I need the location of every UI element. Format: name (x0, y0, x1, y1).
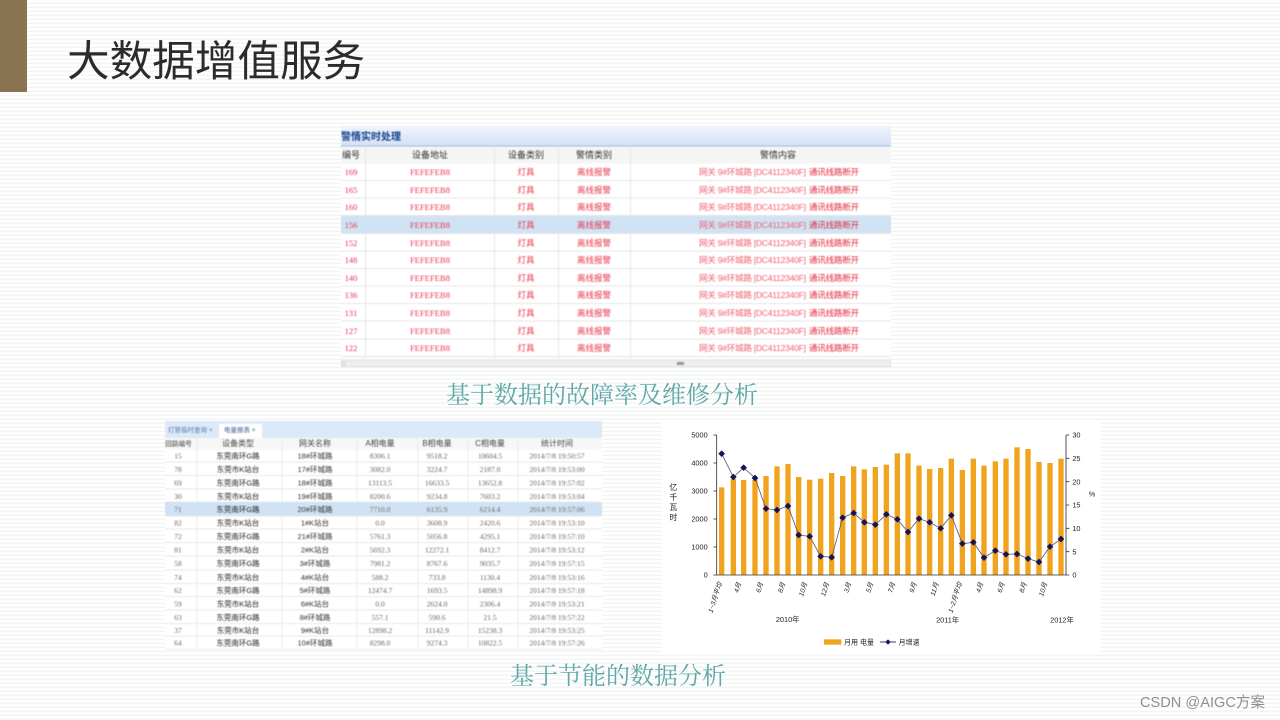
table rows: 72 (174, 532, 182, 541)
x axis month labels: 6月 (754, 581, 765, 594)
table rows: 17#环城路 (297, 464, 333, 474)
table title bar: 警情实时处理 (341, 130, 401, 143)
table rows: 离线报警 (577, 185, 611, 195)
caption: fault analysis: 基于数据的故障率及维修分析 (446, 383, 758, 409)
table rows: 东莞南环G路 (216, 558, 260, 568)
table rows: 网关 9#环城路 [DC4112340F] (699, 255, 806, 265)
table rows: 12474.7 (368, 586, 392, 595)
right axis labels: 10 (1072, 524, 1080, 533)
left axis labels: 1000 (691, 543, 708, 552)
right axis labels: 30 (1072, 431, 1080, 440)
table rows: 离线报警 (577, 255, 611, 265)
table rows: 网关 9#环城路 [DC4112340F] (699, 167, 806, 177)
table rows: 通讯线路断开 (809, 326, 859, 336)
x axis month labels (707, 580, 1049, 614)
table rows: FEFEFEB8 (410, 273, 450, 283)
table header row: 编号 (342, 149, 360, 160)
table rows: FEFEFEB8 (410, 202, 450, 212)
table rows: 4295.1 (480, 532, 501, 541)
table rows: 165 (345, 185, 357, 195)
table rows: 东莞市K站台 (217, 464, 259, 474)
right axis labels: 25 (1072, 454, 1080, 463)
table rows: 140 (345, 273, 357, 283)
table rows: FEFEFEB8 (410, 185, 450, 195)
x axis month labels: 4月 (974, 581, 985, 594)
table rows: 64 (174, 638, 182, 648)
table header: C相电量 (475, 438, 505, 448)
table rows: 136 (345, 290, 357, 300)
x axis month labels: 11月 (929, 581, 941, 597)
table rows (174, 450, 585, 648)
table rows: 8412.7 (480, 546, 501, 554)
table rows: 2420.6 (480, 518, 501, 528)
table rows: 灯具 (517, 290, 535, 300)
table rows: 13113.5 (368, 478, 392, 488)
table rows: 69 (174, 478, 182, 488)
x axis month labels: 6月 (996, 581, 1007, 594)
table rows (345, 167, 859, 353)
table rows: 东莞南环G路 (216, 638, 260, 648)
table rows: 3224.7 (427, 465, 448, 474)
table header: 网关名称 (299, 438, 331, 448)
table rows: 15238.3 (478, 626, 502, 635)
table rows: 离线报警 (577, 202, 611, 212)
table rows: FEFEFEB8 (410, 220, 450, 230)
table rows: FEFEFEB8 (410, 238, 450, 248)
table rows: 152 (345, 238, 357, 248)
table rows: 5761.3 (370, 532, 391, 541)
table rows: 2014/7/8 19:57:26 (529, 638, 585, 648)
left axis labels: 0 (704, 571, 708, 580)
table rows: 21#环城路 (297, 531, 333, 541)
table rows: 4#K站台 (301, 572, 329, 582)
table header (165, 438, 602, 450)
table rows: 2187.0 (480, 465, 501, 474)
table rows: 18#环城路 (297, 478, 333, 488)
table rows: 7603.2 (480, 492, 501, 501)
x axis month labels: 1~2月平均 (947, 580, 964, 614)
table rows: 2014/7/8 19:53:10 (529, 518, 585, 528)
table rows: 590.6 (429, 613, 446, 622)
axes (713, 435, 1069, 575)
table header row: 警情内容 (760, 149, 796, 160)
x axis month labels: 3月 (842, 581, 853, 594)
tab bar: 灯管临时查询 × (168, 425, 213, 434)
table rows: 网关 9#环城路 [DC4112340F] (699, 238, 806, 248)
table rows: 东莞市K站台 (217, 598, 259, 608)
table rows: 2014/7/8 19:57:22 (529, 613, 585, 622)
table header row: 设备类别 (508, 149, 544, 160)
x axis year labels: 2012年 (1050, 616, 1074, 625)
table rows: 148 (345, 255, 357, 265)
right axis labels: 20 (1072, 477, 1080, 486)
highlighted row (341, 216, 891, 234)
table rows: 离线报警 (577, 238, 611, 248)
title: 大数据增值服务 (67, 38, 365, 86)
table rows: 5#环城路 (300, 585, 331, 595)
bars: monthly electricity (719, 447, 1064, 575)
left axis unit: 千 (669, 492, 677, 502)
table rows: 网关 9#环城路 [DC4112340F] (699, 273, 806, 283)
table rows: 东莞南环G路 (216, 478, 260, 488)
table rows: 东莞市K站台 (217, 572, 259, 582)
table rows: 通讯线路断开 (809, 202, 859, 212)
table rows: 81 (174, 546, 182, 554)
table rows: 2#K站台 (301, 544, 329, 554)
table rows: 离线报警 (577, 167, 611, 177)
table rows: 离线报警 (577, 308, 611, 318)
x axis year labels (776, 615, 1074, 625)
table rows: 东莞南环G路 (216, 450, 260, 460)
table rows: 131 (345, 308, 357, 318)
table rows: 通讯线路断开 (809, 308, 859, 318)
table rows: 离线报警 (577, 290, 611, 300)
x axis month labels: 9月 (908, 581, 919, 594)
table rows: 东莞市K站台 (217, 518, 259, 528)
table rows: 东莞南环G路 (216, 585, 260, 595)
table rows: 东莞市K站台 (217, 625, 259, 635)
table rows: 通讯线路断开 (809, 167, 859, 177)
table rows: 122 (345, 343, 357, 353)
table rows: 2624.0 (427, 600, 448, 608)
table rows: 74 (174, 573, 182, 582)
table rows: 8767.6 (427, 559, 448, 568)
highlighted row (165, 502, 602, 516)
table rows: 灯具 (517, 308, 535, 318)
right axis labels: 5 (1072, 547, 1076, 556)
table rows: 10604.5 (478, 452, 502, 460)
table header: 设备类型 (222, 438, 254, 448)
table rows: 9234.8 (427, 492, 448, 501)
table rows: 通讯线路断开 (809, 220, 859, 230)
table rows: 7981.2 (370, 559, 391, 568)
table rows: 8200.6 (370, 492, 391, 501)
table rows: 2014/7/8 19:53:25 (529, 626, 585, 635)
table rows: 离线报警 (577, 326, 611, 336)
caption: energy analysis: 基于节能的数据分析 (510, 664, 726, 690)
table rows: 59 (174, 600, 182, 608)
table rows: 15 (174, 452, 182, 460)
table rows: 离线报警 (577, 220, 611, 230)
table title bar (341, 126, 891, 146)
table rows: 2014/7/8 19:53:21 (529, 600, 585, 608)
table rows: 0.0 (375, 518, 385, 528)
table rows: 网关 9#环城路 [DC4112340F] (699, 220, 806, 230)
legend: 月增速 (899, 638, 920, 647)
table rows: 127 (345, 326, 357, 336)
table rows: 18#环城路 (297, 450, 333, 460)
table rows: 58 (174, 559, 182, 568)
watermark: CSDN @AIGC方案 (1140, 695, 1265, 711)
left axis unit: 瓦 (669, 503, 677, 512)
table rows: 网关 9#环城路 [DC4112340F] (699, 290, 806, 300)
table rows: FEFEFEB8 (410, 255, 450, 265)
table rows: 6214.4 (480, 505, 501, 514)
table rows: 离线报警 (577, 343, 611, 353)
table rows: 21.5 (483, 613, 497, 622)
table rows: 12898.2 (368, 626, 392, 635)
table header: B相电量 (422, 438, 452, 448)
line: monthly growth (718, 450, 1064, 565)
table rows: 灯具 (517, 273, 535, 283)
corner accent block (0, 0, 27, 92)
table rows: 3608.9 (427, 518, 448, 528)
x axis month labels: 8月 (1018, 581, 1029, 594)
table rows: 1#K站台 (301, 518, 329, 528)
right axis labels: 0 (1072, 571, 1076, 580)
table rows: 12272.1 (425, 546, 449, 554)
left axis labels: 5000 (691, 431, 708, 440)
table rows: 71 (174, 505, 182, 514)
table rows: 169 (345, 167, 357, 177)
table rows: 东莞南环G路 (216, 504, 260, 514)
table rows: 14898.9 (478, 586, 502, 595)
table rows: 2014/7/8 19:57:18 (529, 586, 585, 595)
table rows: 37 (174, 626, 182, 635)
left axis labels: 2000 (691, 515, 708, 524)
left axis labels: 4000 (691, 459, 708, 468)
table rows: 156 (345, 220, 357, 230)
tab bar (165, 421, 602, 438)
table rows: 2306.4 (480, 600, 501, 608)
right axis labels (1072, 431, 1080, 580)
table rows: 160 (345, 202, 357, 212)
table rows: FEFEFEB8 (410, 167, 450, 177)
table rows: 2014/7/8 19:53:12 (529, 546, 585, 554)
table rows: 网关 9#环城路 [DC4112340F] (699, 202, 806, 212)
table rows: 9274.3 (427, 638, 448, 648)
table rows: 通讯线路断开 (809, 343, 859, 353)
x axis month labels: 5月 (864, 581, 875, 594)
table rows: 2014/7/8 19:57:10 (529, 532, 585, 541)
x axis month labels: 1~3月平均 (707, 580, 724, 614)
table header row (341, 146, 891, 164)
table rows: 东莞市K站台 (217, 544, 259, 554)
table rows: 通讯线路断开 (809, 185, 859, 195)
table rows: 6#K站台 (301, 598, 329, 608)
table rows: 灯具 (517, 343, 535, 353)
table rows: 通讯线路断开 (809, 273, 859, 283)
right axis labels: 15 (1072, 501, 1080, 510)
table header: 统计时间 (541, 438, 573, 448)
panel: energy data table (164, 420, 602, 650)
table rows: 2014/7/8 19:53:16 (529, 573, 585, 582)
table rows: 网关 9#环城路 [DC4112340F] (699, 343, 806, 353)
x axis month labels: 12月 (819, 581, 831, 597)
table rows: 9#K站台 (301, 625, 329, 635)
table rows: 离线报警 (577, 273, 611, 283)
table rows: 11142.9 (425, 626, 449, 635)
table rows: 588.2 (372, 573, 389, 582)
table rows: 灯具 (517, 202, 535, 212)
panel: electricity combo chart (662, 422, 1100, 652)
table rows: 733.8 (429, 573, 446, 582)
table rows: 30 (174, 492, 182, 501)
table rows: 20#环城路 (297, 504, 333, 514)
table rows: 灯具 (517, 255, 535, 265)
table rows: 63 (174, 613, 182, 622)
table rows: 2014/7/8 19:57:15 (529, 559, 585, 568)
table rows: 灯具 (517, 326, 535, 336)
table rows: 2014/7/8 19:53:00 (529, 465, 585, 474)
table rows: 8#环城路 (300, 612, 331, 622)
table rows: 557.1 (372, 613, 389, 622)
table header row: 设备地址 (412, 149, 448, 160)
table rows: 灯具 (517, 220, 535, 230)
panel: alarm realtime table (340, 126, 892, 367)
table rows: 灯具 (517, 185, 535, 195)
table header: 回路编号 (165, 439, 192, 448)
table rows: 82 (174, 518, 182, 528)
table rows: 5056.8 (427, 532, 448, 541)
table header: A相电量 (365, 438, 395, 448)
table rows: FEFEFEB8 (410, 308, 450, 318)
x axis month labels: 10月 (797, 581, 809, 597)
table rows: 9518.2 (427, 452, 448, 460)
table rows: 8298.0 (370, 638, 391, 648)
table rows: 网关 9#环城路 [DC4112340F] (699, 308, 806, 318)
table rows: 通讯线路断开 (809, 238, 859, 248)
table rows: 62 (174, 586, 182, 595)
x axis month labels: 8月 (776, 581, 787, 594)
table rows: 灯具 (517, 167, 535, 177)
scrollbar (341, 360, 891, 367)
table rows: 通讯线路断开 (809, 290, 859, 300)
table rows: 2014/7/8 19:57:02 (529, 478, 585, 488)
x axis year labels: 2010年 (776, 615, 799, 624)
legend: 月用 电量 (844, 638, 874, 647)
table rows: 3082.0 (370, 465, 391, 474)
x axis month labels: 10月 (1037, 581, 1049, 597)
left axis unit: 亿 (669, 482, 677, 492)
table rows: 10822.5 (478, 638, 502, 648)
x axis month labels: 4月 (732, 581, 743, 594)
table rows: 7710.0 (370, 505, 391, 514)
left axis unit: 时 (669, 512, 677, 522)
table rows: 1130.4 (480, 573, 500, 582)
table rows: 2014/7/8 19:57:06 (529, 505, 585, 514)
table header row: 警情类别 (576, 149, 612, 160)
table rows: 网关 9#环城路 [DC4112340F] (699, 185, 806, 195)
table rows: 78 (174, 465, 182, 474)
right axis unit: % (1089, 489, 1096, 498)
table rows: 19#环城路 (297, 491, 333, 501)
table rows: FEFEFEB8 (410, 290, 450, 300)
table rows: 0.0 (375, 600, 385, 608)
x axis month labels: 7月 (886, 581, 897, 594)
left axis unit (669, 482, 677, 522)
table rows: 东莞南环G路 (216, 531, 260, 541)
table rows: 2014/7/8 19:50:57 (529, 452, 585, 460)
tab bar: 电量报表 × (224, 425, 256, 434)
table rows: 灯具 (517, 238, 535, 248)
table rows: 13652.8 (478, 478, 502, 488)
x axis year labels: 2011年 (936, 616, 959, 625)
table rows: 5692.3 (370, 546, 391, 554)
table rows: 2014/7/8 19:53:04 (529, 492, 585, 501)
table rows: 8306.1 (370, 452, 391, 460)
table rows: 网关 9#环城路 [DC4112340F] (699, 326, 806, 336)
legend (824, 638, 920, 647)
left axis labels: 3000 (691, 487, 708, 496)
table rows: 3#环城路 (300, 558, 331, 568)
table rows: 东莞市K站台 (217, 491, 259, 501)
table rows: 9035.7 (480, 559, 501, 568)
table rows: FEFEFEB8 (410, 326, 450, 336)
table rows: FEFEFEB8 (410, 343, 450, 353)
table rows: 16633.5 (425, 478, 449, 488)
table rows: 1693.5 (427, 586, 448, 595)
left axis labels (691, 431, 708, 580)
table rows: 6135.9 (427, 505, 448, 514)
table rows: 通讯线路断开 (809, 255, 859, 265)
table rows: 东莞南环G路 (216, 612, 260, 622)
table rows: 10#环城路 (297, 638, 333, 648)
